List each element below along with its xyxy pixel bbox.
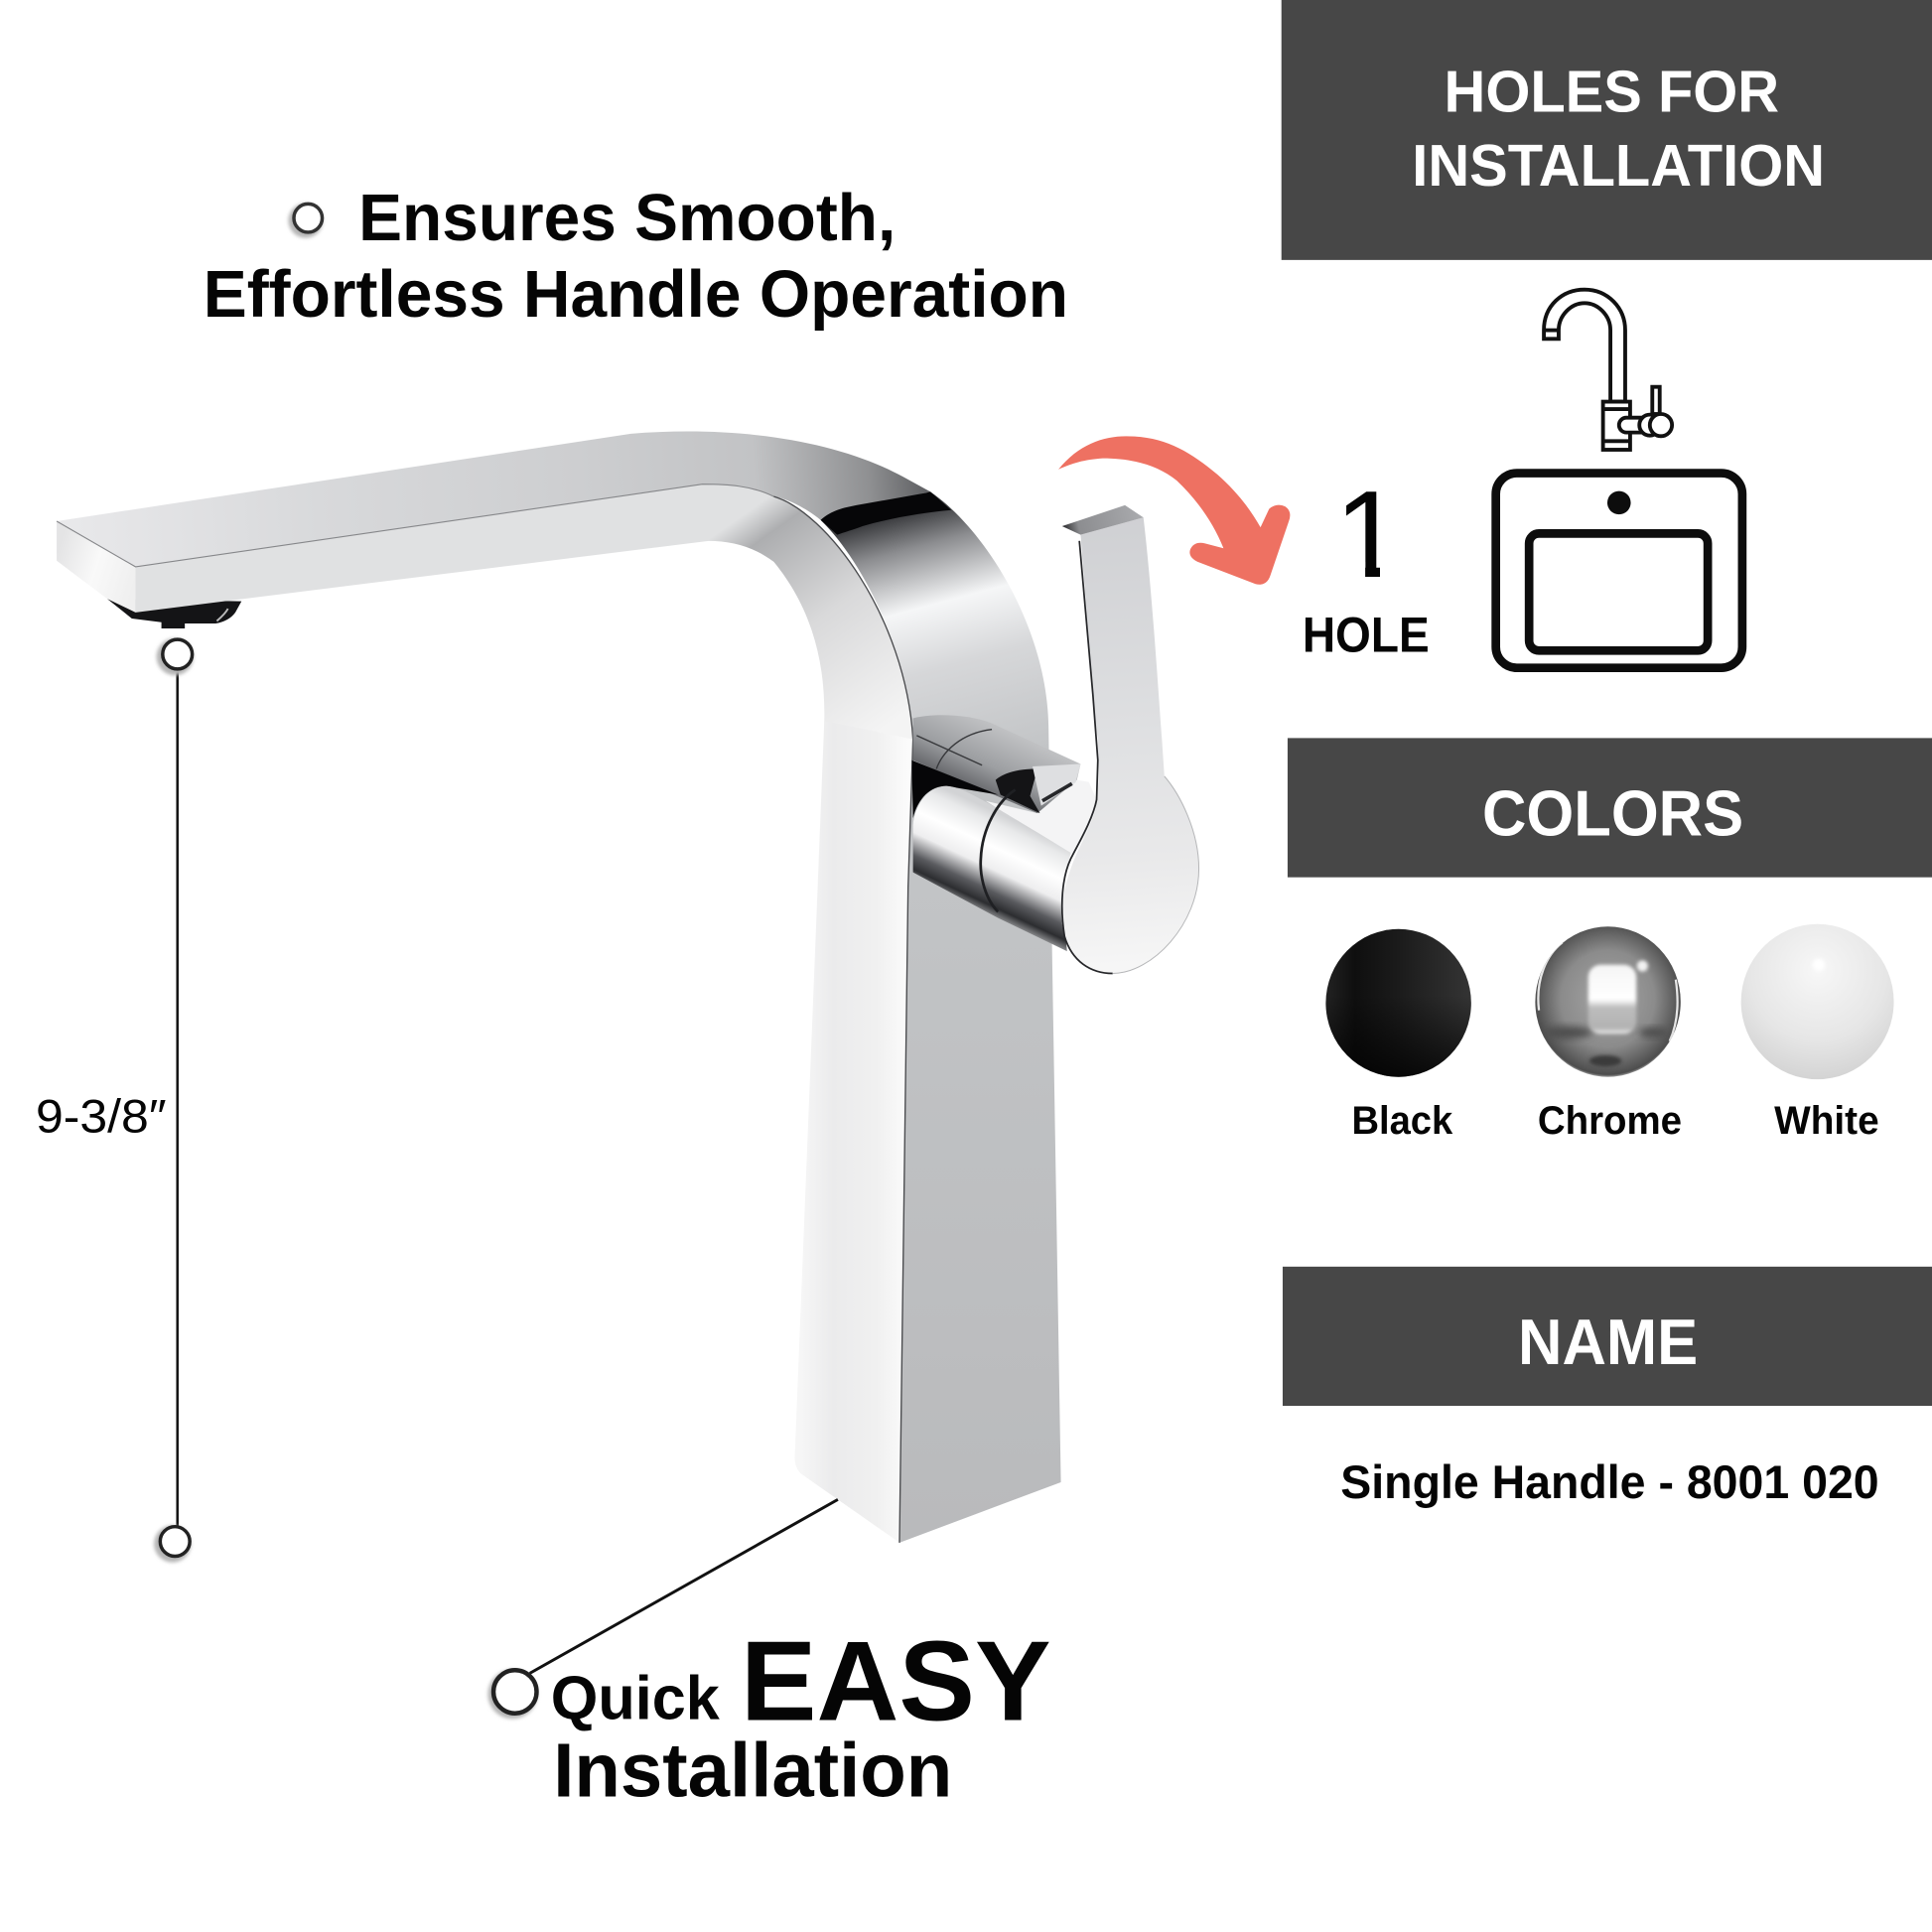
spout height dimension [36,638,194,1563]
column edge line [773,496,913,1543]
swatch: black: Black [1351,1099,1453,1143]
callout: quick easy installation: Quick [551,1664,720,1732]
callout: quick easy installation: EASY [741,1619,1051,1745]
handle neck [913,715,1080,813]
handle lever [1061,517,1199,973]
spout edge lines [57,484,773,567]
callout: quick easy installation: Installation [553,1727,952,1813]
neck dark throat [996,768,1039,813]
heading: ensures smooth operation: Ensures Smooth, [358,181,896,255]
icon: faucet [1544,290,1672,450]
swatch: chrome: Chrome [1538,1099,1682,1143]
black reflection band [821,491,951,535]
panel header: name [1283,1267,1932,1406]
panel header: holes for installation: HOLES FOR [1445,58,1779,124]
product name: Single Handle - 8001 020 [1340,1455,1879,1508]
icon: sink with one hole [1496,474,1742,668]
column left face [794,721,913,1543]
lever top cap [1062,505,1144,535]
label: 1 hole [1305,491,1428,652]
panel header: name: NAME [1518,1307,1698,1378]
handle cylinder [913,786,1070,951]
dark underside of neck [911,760,998,818]
spout top face [57,432,930,567]
swatch: black [1325,929,1471,1143]
handle shoulder [986,780,1099,855]
label: 1 hole: HOLE [1303,608,1430,663]
panel header: holes for installation: INSTALLATION [1412,132,1825,199]
lever edge line [1062,541,1113,973]
spout front face [136,484,913,888]
column right face [821,491,1051,888]
neck end ring [1033,763,1080,806]
neck end shadow [1042,783,1072,801]
heading: ensures smooth operation: Effortless Handle Operation [204,257,1068,332]
spout tip end face [57,521,136,613]
neck detail lines [916,730,992,768]
column lower right face [899,886,1061,1543]
spout height dimension: 9-3/8″ [36,1090,167,1143]
panel header: colors [1288,738,1932,878]
lever side strip [1063,526,1098,799]
faucet product image [57,432,1199,1543]
swatch: white [1741,924,1894,1143]
callout ring: handle operation [288,204,323,238]
label: 1 hole: 1 [1334,467,1403,604]
cylinder seam [981,790,1016,911]
lever paddle outline [1113,776,1199,973]
swatch: chrome [1535,926,1682,1143]
rotation arrow [1058,436,1290,585]
faucet aerator [107,599,241,628]
panel header: colors: COLORS [1482,777,1743,849]
callout: quick easy installation [487,1499,1051,1813]
heading: ensures smooth operation [204,181,1068,332]
swatch: white: White [1774,1099,1879,1143]
panel header: holes for installation [1282,0,1932,260]
